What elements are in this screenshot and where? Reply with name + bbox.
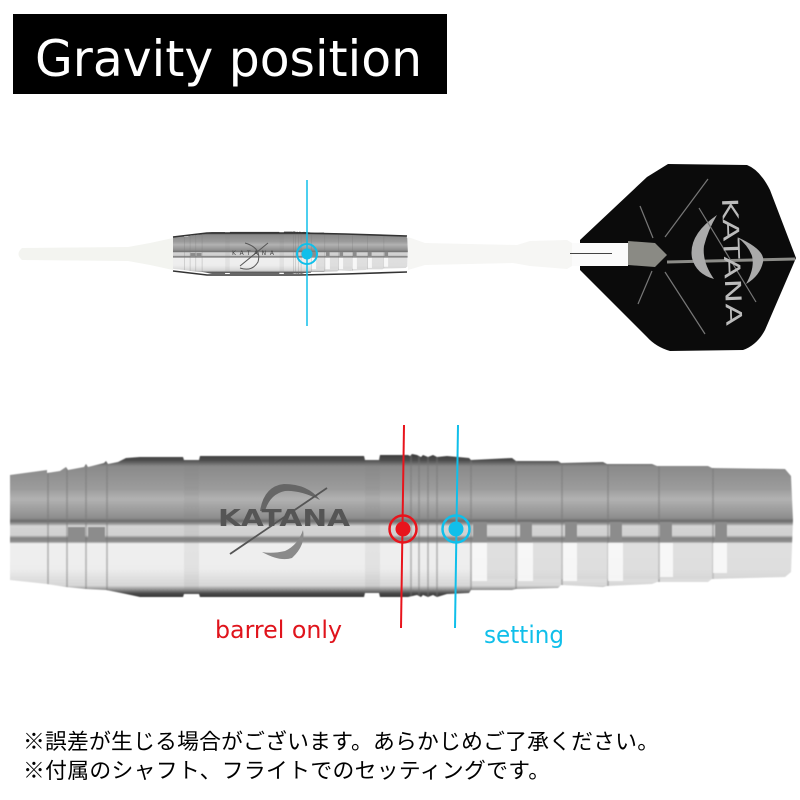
flight [570, 164, 796, 351]
title [13, 14, 447, 94]
barrel logo: KATANA [218, 506, 350, 532]
small barrel [170, 227, 410, 278]
full dart illustration [18, 164, 796, 351]
enlarged barrel [0, 440, 800, 610]
marker: setting [442, 425, 470, 628]
shaft [408, 237, 628, 270]
barrel logo [218, 484, 350, 559]
notes: ※付属のシャフト、フライトでのセッティングです。 [23, 758, 550, 783]
marker: barrel only [390, 425, 416, 628]
notes [23, 729, 659, 783]
notes: ※誤差が生じる場合がございます。あらかじめご了承ください。 [23, 729, 659, 754]
label: setting: setting [484, 621, 564, 649]
label: barrel only: barrel only [215, 616, 342, 644]
small barrel: KATANA [232, 250, 275, 257]
dart tip [18, 238, 173, 270]
flight: KATANA [716, 197, 745, 326]
title: Gravity position [35, 30, 422, 88]
center of gravity marker: small dart [297, 180, 317, 326]
flight holder [628, 241, 667, 267]
